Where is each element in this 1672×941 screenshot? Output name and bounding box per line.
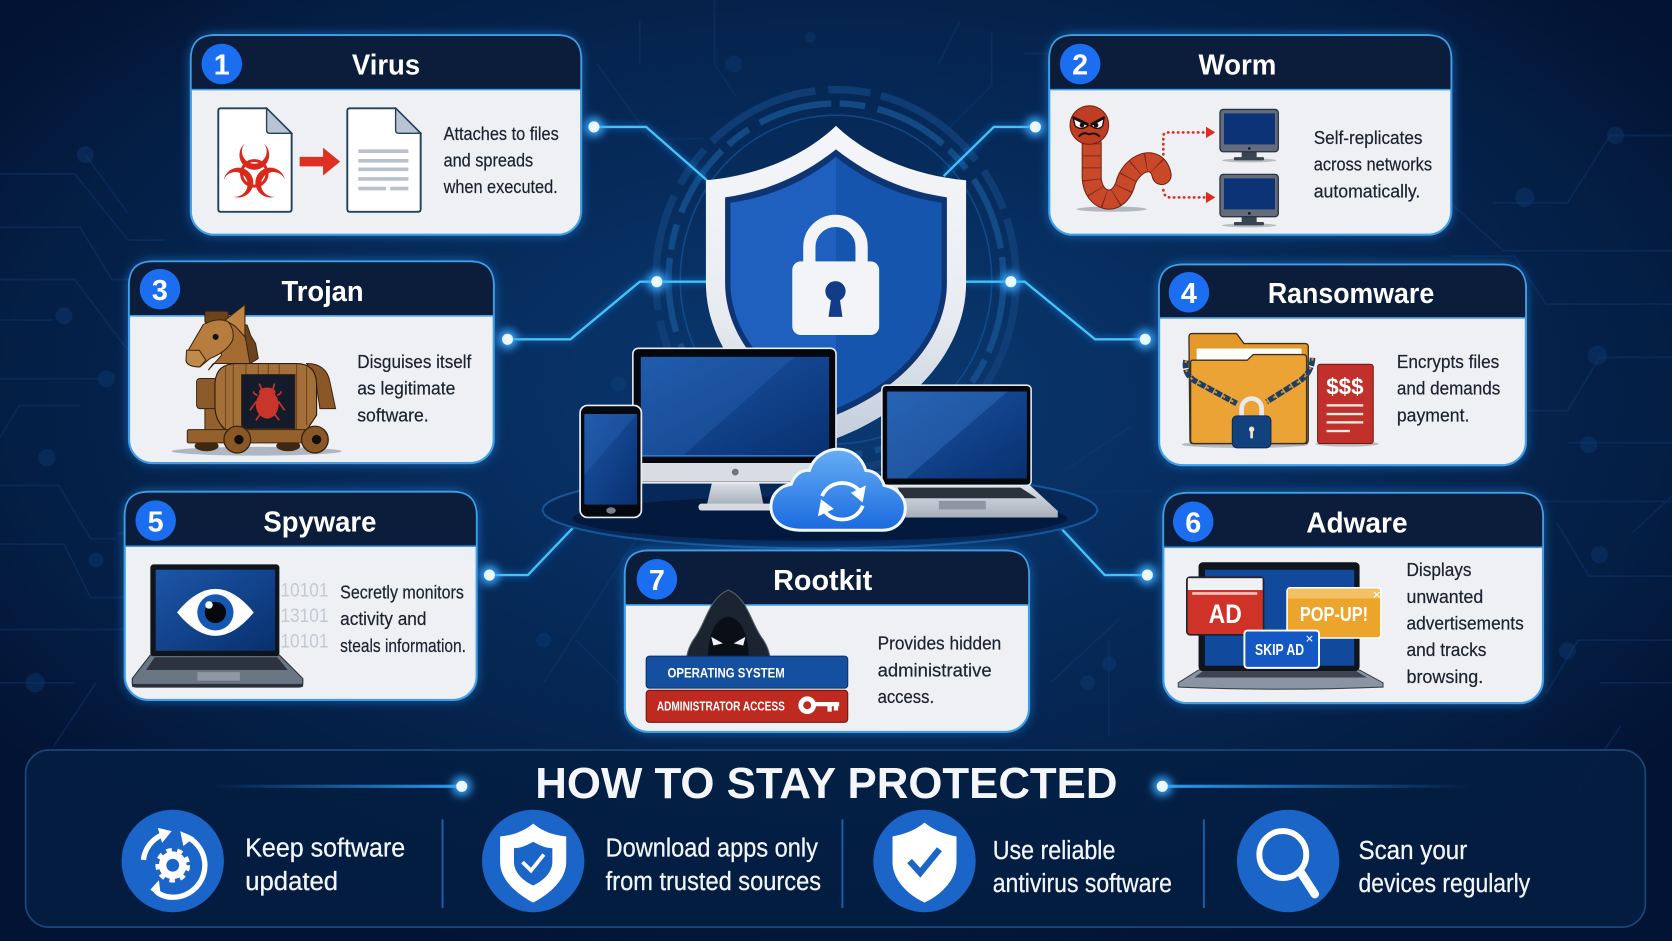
icon: magnifier bbox=[1237, 810, 1339, 912]
description bbox=[1406, 559, 1524, 687]
bug bbox=[250, 384, 285, 420]
laptop bbox=[874, 385, 1058, 517]
number badge: 3 bbox=[152, 275, 168, 307]
pop-up window: ✕ bbox=[1372, 590, 1381, 602]
panel: Rootkit bbox=[625, 551, 1029, 732]
heading: Spyware bbox=[263, 505, 376, 537]
devices group bbox=[580, 348, 1058, 530]
administrator access bar bbox=[646, 690, 848, 722]
arrow bbox=[300, 148, 340, 176]
ad window bbox=[1187, 577, 1264, 635]
pop-up window: POP-UP! bbox=[1300, 604, 1368, 626]
dotted red arrows bbox=[1163, 127, 1215, 203]
operating system bar: OPERATING SYSTEM bbox=[668, 664, 785, 680]
number badge: 4 bbox=[1181, 278, 1197, 310]
tip: keep software updated: Keep software bbox=[245, 833, 405, 863]
panel: how to stay protected bbox=[26, 750, 1645, 927]
description: as legitimate bbox=[357, 378, 455, 399]
monitor bbox=[633, 348, 836, 511]
heading: Virus bbox=[352, 49, 420, 81]
description: administrative bbox=[878, 659, 992, 680]
skip ad button: SKIP AD bbox=[1255, 642, 1304, 659]
number badge bbox=[637, 559, 677, 600]
heading: Worm bbox=[1199, 49, 1276, 81]
binary digits: 10101 bbox=[280, 580, 328, 601]
description: and spreads bbox=[444, 149, 533, 170]
binary digits: 10101 bbox=[280, 632, 328, 653]
description: Disguises itself bbox=[357, 351, 472, 372]
icon: infected file bbox=[218, 108, 292, 212]
heading: HOW TO STAY PROTECTED bbox=[535, 759, 1118, 808]
icon: top monitor bbox=[1220, 109, 1278, 162]
number badge: 5 bbox=[148, 506, 164, 538]
tip: use reliable antivirus: antivirus software bbox=[993, 868, 1172, 898]
number badge: 7 bbox=[649, 565, 665, 597]
description: software. bbox=[357, 404, 429, 425]
pop-up window bbox=[1287, 588, 1381, 638]
tip: keep software updated bbox=[122, 810, 405, 912]
number badge bbox=[1060, 44, 1100, 84]
tip: use reliable antivirus bbox=[873, 810, 1172, 912]
description: Attaches to files bbox=[444, 123, 559, 144]
icon: ransom note bbox=[1316, 364, 1379, 447]
description: Displays bbox=[1406, 559, 1472, 580]
icon: locked folder bbox=[1182, 334, 1313, 448]
decorative line right bbox=[1153, 777, 1472, 796]
description: Provides hidden bbox=[878, 633, 1001, 654]
description bbox=[340, 582, 466, 656]
panel: Spyware bbox=[125, 492, 477, 700]
description: Self-replicates bbox=[1314, 127, 1422, 148]
number badge: 2 bbox=[1072, 50, 1088, 82]
binary digits: 13101 bbox=[280, 606, 328, 627]
description bbox=[1397, 351, 1500, 425]
description bbox=[878, 633, 1001, 707]
heading: Ransomware bbox=[1268, 277, 1434, 309]
panel: Adware bbox=[1163, 493, 1543, 703]
number badge bbox=[135, 500, 176, 541]
description: automatically. bbox=[1314, 180, 1420, 201]
phone bbox=[580, 405, 641, 517]
heading: Adware bbox=[1306, 506, 1408, 538]
icon: ransom note: $$$ bbox=[1326, 374, 1364, 400]
tip: scan devices regularly bbox=[1237, 810, 1531, 912]
description: across networks bbox=[1314, 154, 1432, 175]
icon: antivirus shield bbox=[873, 810, 976, 912]
padlock bbox=[792, 221, 879, 335]
description: Encrypts files bbox=[1397, 351, 1499, 372]
description: when executed. bbox=[443, 176, 558, 197]
administrator access bar: ADMINISTRATOR ACCESS bbox=[657, 699, 785, 714]
icon: laptop with eye bbox=[132, 564, 303, 687]
shield with padlock bbox=[706, 126, 966, 438]
heading: Rootkit bbox=[773, 564, 873, 596]
number badge bbox=[202, 44, 242, 84]
number badge bbox=[1169, 272, 1209, 313]
description: access. bbox=[878, 686, 934, 707]
description: and tracks bbox=[1406, 639, 1486, 660]
operating system bar bbox=[646, 656, 848, 688]
description: activity and bbox=[340, 608, 427, 629]
icon: laptop with ads bbox=[1178, 562, 1383, 689]
tip: keep software updated: updated bbox=[245, 866, 338, 896]
decorative line left bbox=[213, 777, 471, 796]
concentric security rings bbox=[656, 90, 1016, 469]
number badge: 1 bbox=[214, 50, 230, 82]
description: payment. bbox=[1397, 404, 1469, 425]
description bbox=[357, 351, 472, 425]
number badge: 6 bbox=[1185, 507, 1201, 539]
icon: bottom monitor bbox=[1220, 174, 1278, 227]
tip: use reliable antivirus: Use reliable bbox=[993, 835, 1115, 865]
tip: download from trusted sources bbox=[482, 810, 821, 912]
tip: download from trusted sources: from trusted sources bbox=[606, 866, 821, 896]
icon: worm bbox=[1070, 106, 1162, 212]
tip: download from trusted sources: Download apps only bbox=[606, 833, 819, 863]
description: and demands bbox=[1397, 378, 1500, 399]
description: browsing. bbox=[1406, 666, 1483, 687]
number badge bbox=[1173, 501, 1213, 542]
description: steals information. bbox=[340, 635, 466, 656]
central platform bbox=[543, 472, 1097, 548]
description bbox=[1314, 127, 1432, 201]
description: Secretly monitors bbox=[340, 582, 464, 603]
icon: trojan horse bbox=[172, 305, 342, 456]
heading: Trojan bbox=[282, 275, 364, 307]
icon: document bbox=[347, 108, 421, 212]
description: advertisements bbox=[1406, 612, 1524, 633]
panel: Trojan bbox=[129, 261, 494, 463]
icon: shield check bbox=[482, 810, 584, 912]
icon: update gear bbox=[122, 810, 224, 912]
skip ad button: ✕ bbox=[1305, 633, 1314, 645]
connector lines bbox=[480, 117, 1157, 585]
skip ad button bbox=[1244, 631, 1319, 668]
description bbox=[443, 123, 559, 197]
icon: hooded hacker bbox=[687, 590, 770, 657]
binary digits bbox=[280, 580, 328, 653]
cloud sync bbox=[771, 449, 905, 530]
panel: Virus bbox=[191, 35, 581, 235]
description: unwanted bbox=[1406, 586, 1483, 607]
ad window: AD bbox=[1209, 599, 1242, 629]
tip: scan devices regularly: Scan your bbox=[1358, 835, 1468, 865]
tip: scan devices regularly: devices regularly bbox=[1358, 868, 1531, 898]
number badge bbox=[140, 269, 180, 309]
panel: Worm bbox=[1049, 35, 1451, 235]
icon: key bbox=[801, 699, 839, 712]
panel: Ransomware bbox=[1159, 265, 1526, 465]
